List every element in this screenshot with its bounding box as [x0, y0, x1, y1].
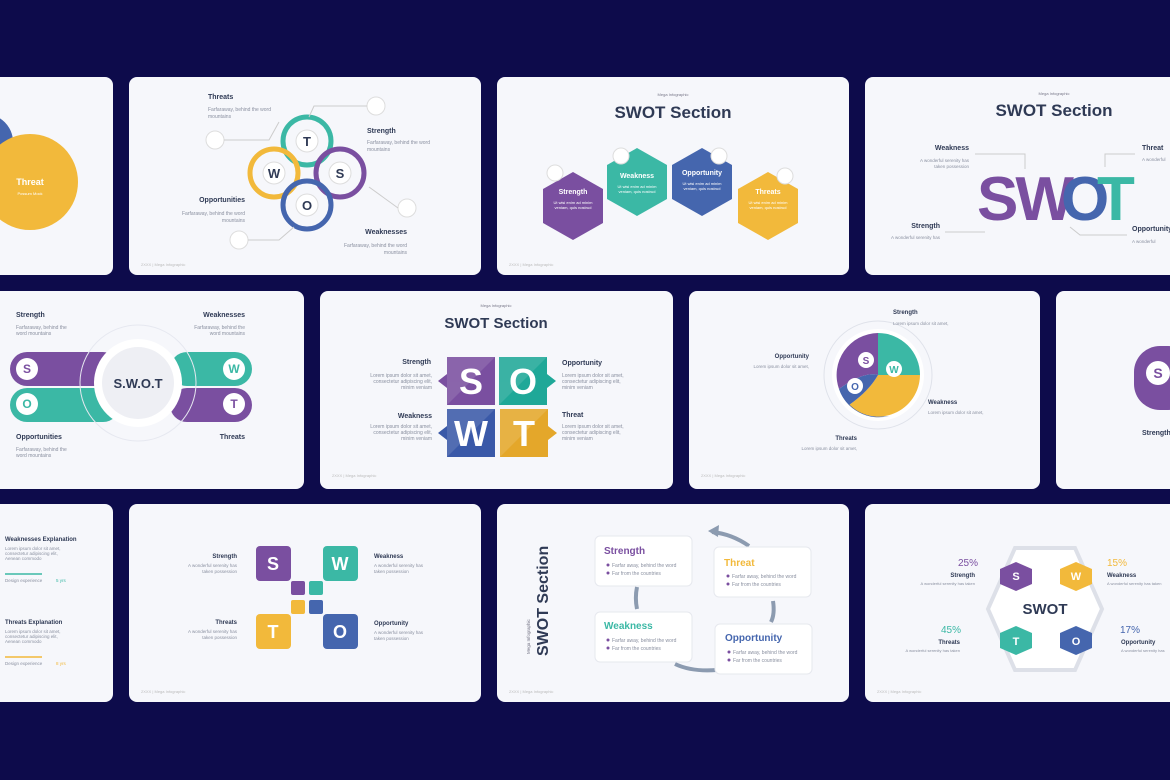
slide: interlocking circles: Farfaraway, behind the word	[367, 140, 430, 146]
slide: cross squares: A wonderful serenity has	[374, 630, 424, 635]
circle: blue partial	[0, 114, 13, 170]
hexagons	[543, 148, 798, 240]
diagram: four rings	[250, 117, 364, 229]
swirl circle	[824, 321, 932, 429]
slide: hex SWOT percentages: A wonderful serenity has taken	[921, 581, 975, 586]
swirl circle: S	[863, 356, 870, 367]
slide: SWOT squares: Opportunity	[562, 360, 602, 367]
slide: hex SWOT percentages: Weakness	[1107, 573, 1137, 579]
slide: cycle cards: Threat	[724, 558, 755, 569]
slide: hexagons: Strength	[559, 189, 587, 196]
big word: T	[1097, 165, 1135, 234]
vertical title: Mega Infographic	[526, 618, 531, 654]
slide: interlocking circles: mountains	[367, 147, 391, 153]
small hexes: O	[1072, 636, 1081, 648]
slide: cross squares: A wonderful serenity has	[188, 563, 238, 568]
slide: explanations: Weaknesses Explanation	[5, 537, 77, 543]
slide: explanations: Aenean commodo	[5, 556, 42, 561]
slide: cycle cards: Opportunity	[725, 633, 783, 644]
title: SWOT Section	[444, 315, 548, 332]
slide: hex SWOT percentages: A wonderful serenity has taken	[906, 648, 960, 653]
slide: hexagons	[497, 77, 849, 275]
circle: threat: Possum Mock	[17, 191, 43, 196]
slide: S.W.O.T pills: Farfaraway, behind the	[194, 325, 245, 331]
slide: hex SWOT percentages: Threats	[938, 640, 961, 646]
squares: W	[454, 413, 488, 454]
slide: S.W.O.T pills: W	[228, 362, 240, 376]
slide: explanations: Design experience	[5, 661, 43, 666]
slide: cycle cards: Farfar away, behind the word	[732, 574, 797, 580]
labels	[199, 94, 407, 236]
small hexes	[1000, 562, 1092, 655]
slide: SWOT squares	[320, 291, 673, 489]
slide: cycle cards: Far from the countries	[733, 658, 782, 664]
slide: cycle cards: Strength	[604, 546, 645, 557]
slide: SWOT word: A wonderful serenity has	[891, 235, 941, 240]
slide: cross squares: taken possession	[374, 636, 409, 641]
slide: SWOT word: Weakness	[935, 145, 969, 152]
slide: S.W.O.T pills: Threats	[220, 434, 245, 441]
vertical title	[526, 546, 552, 656]
slide: hexagons: Opportunity	[682, 170, 722, 177]
slide: circle swirl: Lorem ipsum dolor sit amet,	[801, 446, 857, 451]
slide: explanations: Design experience	[5, 578, 43, 583]
slide: cycle cards: Farfar away, behind the word	[733, 650, 798, 656]
slide: SWOT squares: consectetur adipiscing elit,	[373, 379, 432, 385]
slide: interlocking circles: T	[303, 134, 311, 149]
title: SWOT Section	[614, 103, 732, 122]
slide: SWOT squares: minim veniam	[401, 436, 432, 442]
squares	[438, 357, 557, 457]
slide: SWOT squares: Lorem ipsum dolor sit amet,	[562, 424, 624, 430]
cross diagram: S	[267, 554, 279, 574]
pills	[10, 352, 252, 422]
big hexagon	[988, 548, 1102, 670]
slide: SWOT squares: consectetur adipiscing elit,	[562, 379, 621, 385]
slide: SWOT squares: consectetur adipiscing elit,	[373, 430, 432, 436]
center circle	[80, 325, 196, 441]
slide: interlocking circles: S	[336, 166, 345, 181]
slide: hexagons: Mega Infographic	[658, 92, 688, 97]
slide: interlocking circles: Farfaraway, behind the word	[344, 243, 407, 249]
slide: explanations: 8 yrs	[56, 661, 67, 666]
squares: S	[459, 361, 483, 402]
slide: SWOT squares: 2XXX | Mega Infographic	[332, 473, 376, 478]
labels: Threats	[208, 94, 233, 101]
circle: threat: Threat	[16, 177, 44, 187]
slide: explanations: consectetur adipiscing elit,	[5, 551, 58, 556]
slide: SWOT word: A wonderful serenity has	[920, 158, 970, 163]
slide: interlocking circles: mountains	[222, 218, 245, 224]
slide: S.W.O.T pills: Opportunities	[16, 434, 62, 441]
cards	[595, 536, 812, 674]
slide: hex SWOT percentages: 17%	[1120, 625, 1140, 636]
slide: cycle cards: Farfar away, behind the word	[612, 638, 677, 644]
slide: SWOT squares: Threat	[562, 412, 584, 419]
slide: SWOT squares: Strength	[402, 359, 431, 366]
labels: Strength	[367, 128, 396, 135]
slide: interlocking circles: mountains	[384, 250, 407, 256]
slide: explanations	[0, 504, 113, 702]
center circle: S.W.O.T	[113, 376, 163, 391]
slide: SWOT squares: Lorem ipsum dolor sit amet,	[370, 373, 432, 379]
small hexes: T	[1013, 636, 1020, 648]
slide: circle swirl: 2XXX | Mega Infographic	[701, 473, 745, 478]
slide: SWOT squares: minim veniam	[401, 385, 432, 391]
slide: interlocking circles: O	[302, 198, 312, 213]
slide: circle swirl: Lorem ipsum dolor sit amet,	[928, 410, 984, 415]
slide: S.W.O.T pills: word mountains	[16, 331, 52, 337]
slide: hex SWOT percentages: 15%	[1107, 558, 1127, 569]
slide: cross squares: Weakness	[374, 554, 404, 560]
slide: explanations: Lorem ipsum dolor sit amet,	[5, 546, 61, 551]
slide: SWOT squares: Lorem ipsum dolor sit amet,	[562, 373, 624, 379]
cross diagram: O	[333, 622, 347, 642]
slide: cycle cards: Far from the countries	[732, 582, 781, 588]
slide: hexagons: veniam, quis nostrud	[750, 205, 786, 210]
circle: threat	[0, 134, 78, 230]
slide: SWOT squares: consectetur adipiscing elit,	[562, 430, 621, 436]
slide: interlocking circles	[129, 77, 481, 275]
slide: S.W.O.T pills: word mountains	[16, 453, 52, 459]
slide: S.W.O.T pills: S	[23, 362, 31, 376]
slide: SWOT squares: Lorem ipsum dolor sit amet,	[370, 424, 432, 430]
small hexes: W	[1071, 571, 1082, 583]
slide: SWOT squares: minim veniam	[562, 436, 593, 442]
slide: cycle cards: Far from the countries	[612, 571, 661, 577]
slide: cross squares: taken possession	[202, 569, 237, 574]
slide: hexagons: 2XXX | Mega Infographic	[509, 262, 553, 267]
cycle arrow	[636, 532, 774, 670]
slide: cross squares: Strength	[212, 554, 237, 560]
labels: Weaknesses	[365, 229, 407, 236]
slide: hex SWOT percentages: SWOT	[1022, 601, 1068, 618]
icons	[206, 97, 416, 249]
slide: hex SWOT percentages: A wonderful serenity has taken	[1107, 581, 1161, 586]
slide: cycle cards: Weakness	[604, 621, 653, 632]
slide: SWOT word: Threat	[1142, 145, 1164, 152]
slide: hex SWOT percentages: 2XXX | Mega Infographic	[877, 689, 921, 694]
slide: cycle cards	[497, 504, 849, 702]
slide: hexagons: Ut wisi enim ad minim	[749, 200, 788, 205]
slide: cross squares: taken possession	[374, 569, 409, 574]
cross diagram	[256, 546, 358, 649]
slide: interlocking circles: mountains	[208, 114, 232, 120]
slide: SWOT squares: Mega Infographic	[481, 303, 511, 308]
slide: hexagons: Threats	[755, 189, 781, 196]
slide: hexagons: Weakness	[620, 173, 654, 180]
slide: explanations: Threats Explanation	[5, 620, 63, 626]
slide: S.W.O.T pills: O	[22, 397, 32, 411]
slide: cross squares: Threats	[215, 620, 238, 626]
slide: circle swirl: Threats	[835, 436, 858, 442]
slide: cross squares: Opportunity	[374, 621, 409, 627]
slide: cross squares: A wonderful serenity has	[188, 629, 238, 634]
slide: S.W.O.T pills: Weaknesses	[203, 312, 245, 319]
vertical title: SWOT Section	[535, 546, 552, 656]
slide: S.W.O.T pills: Strength	[16, 312, 45, 319]
slide: explanations: Aenean commodo	[5, 639, 42, 644]
slide: cycle cards: Far from the countries	[612, 646, 661, 652]
big word: O	[1061, 165, 1107, 234]
small hexes: S	[1012, 571, 1020, 583]
slide: SWOT word: taken possession	[934, 164, 969, 169]
slide: SWOT word: Mega Infographic	[1039, 91, 1069, 96]
slide: SWOT word: A wonderful	[1132, 239, 1156, 244]
slide: hex SWOT percentages	[865, 504, 1170, 702]
big word: SW	[977, 165, 1074, 234]
big word	[977, 165, 1135, 234]
slide: hex SWOT percentages: A wonderful serenity has	[1121, 648, 1165, 653]
slide: hexagons: Ut wisi enim ad minim	[683, 181, 722, 186]
slide: cross squares: A wonderful serenity has	[374, 563, 424, 568]
slide: circle swirl	[689, 291, 1040, 489]
slide: S.W.O.T pills: T	[230, 397, 238, 411]
squares: O	[509, 361, 537, 402]
slide: SWOT squares: minim veniam	[562, 385, 593, 391]
slide: interlocking circles: Farfaraway, behind the word	[182, 211, 245, 217]
slide: hex SWOT percentages: 45%	[941, 625, 961, 636]
slide: explanations: Lorem ipsum dolor sit amet,	[5, 629, 61, 634]
slide: partial pill: Strength	[1142, 430, 1170, 437]
slide: hexagons: veniam, quis nostrud	[555, 205, 591, 210]
slide: hex SWOT percentages: Opportunity	[1121, 640, 1156, 646]
labels: Opportunities	[199, 197, 245, 204]
cross diagram: T	[268, 622, 278, 642]
slide: cross squares: 2XXX | Mega Infographic	[141, 689, 185, 694]
slide: cross squares	[129, 504, 481, 702]
slide: hex SWOT percentages: 25%	[958, 558, 978, 569]
slide: threat circle partial	[0, 77, 113, 275]
slide: explanations: consectetur adipiscing elit,	[5, 634, 58, 639]
slide: circle swirl: Strength	[893, 310, 918, 316]
slide: cycle cards: Farfar away, behind the word	[612, 563, 677, 569]
swirl circle: O	[851, 382, 859, 393]
slide: cycle cards: 2XXX | Mega Infographic	[509, 689, 553, 694]
slide: hexagons: veniam, quis nostrud	[684, 186, 720, 191]
slide: partial pill	[1056, 291, 1170, 489]
slide: S.W.O.T pills: Farfaraway, behind the	[16, 325, 67, 331]
slide: partial pill: S	[1153, 365, 1163, 381]
squares: T	[513, 413, 535, 454]
slide: SWOT word: A wonderful	[1142, 157, 1166, 162]
slide: hex SWOT percentages: Strength	[950, 573, 975, 579]
slide: explanations: 5 yrs	[56, 578, 67, 583]
slide: S.W.O.T pills: word mountains	[210, 331, 245, 337]
slide: circle swirl: Opportunity	[775, 354, 810, 360]
slide: interlocking circles: 2XXX | Mega Infographic	[141, 262, 185, 267]
slide: interlocking circles: Farfaraway, behind the word	[208, 107, 271, 113]
slide: SWOT word: Strength	[911, 223, 940, 230]
slide: hexagons: veniam, quis nostrud	[619, 189, 655, 194]
slide: S.W.O.T pills	[0, 291, 304, 489]
slide: SWOT squares: Weakness	[398, 413, 432, 420]
slide: interlocking circles: W	[268, 166, 281, 181]
slide: S.W.O.T pills: Farfaraway, behind the	[16, 447, 67, 453]
slide: SWOT word	[865, 77, 1170, 275]
slide: hexagons: Ut wisi enim ad minim	[618, 184, 657, 189]
slide: circle swirl: Lorem ipsum dolor sit amet,	[893, 321, 949, 326]
swirl circle: W	[889, 365, 899, 376]
slide: circle swirl: Lorem ipsum dolor sit amet,	[753, 364, 809, 369]
cross diagram: W	[332, 554, 348, 574]
slide: hexagons: Ut wisi enim ad minim	[554, 200, 593, 205]
title: SWOT Section	[995, 101, 1113, 120]
slide: circle swirl: Weakness	[928, 400, 958, 406]
slide: cross squares: taken possession	[202, 635, 237, 640]
